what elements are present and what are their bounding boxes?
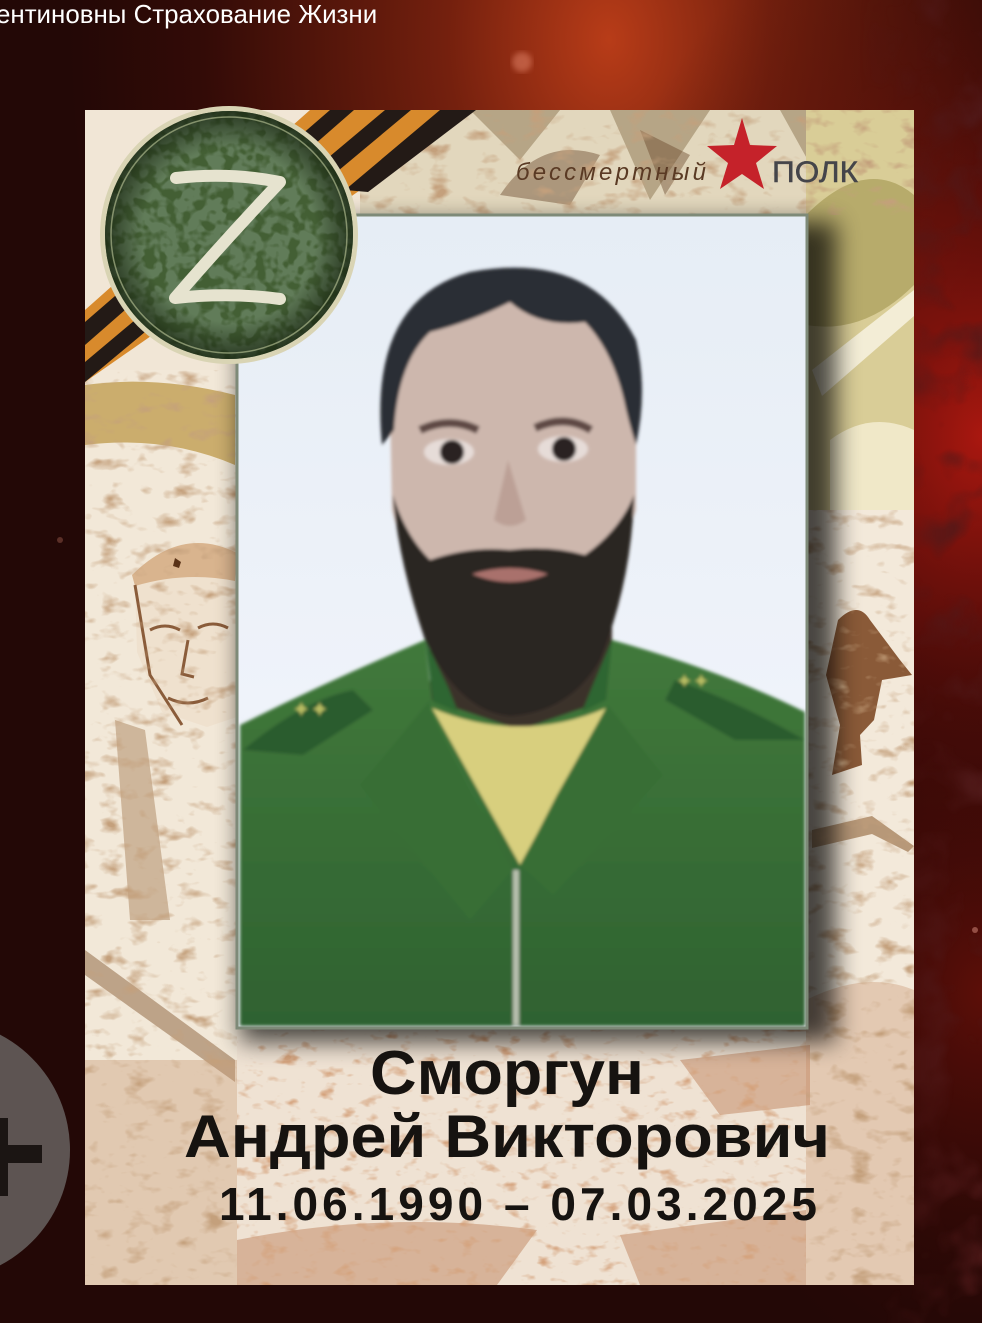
name and dates	[184, 1039, 830, 1230]
photo shadow	[240, 222, 836, 1042]
logo: Immortal Regiment: бессмертный	[516, 159, 706, 186]
memorial card	[85, 105, 914, 1285]
page caption text: ентиновны Страхование Жизни	[0, 1, 377, 29]
collage: top band	[360, 110, 914, 215]
St George ribbon	[85, 110, 476, 382]
portrait photo	[237, 215, 807, 1028]
life dates: 11.06.1990 – 07.03.2025	[219, 1178, 817, 1230]
collage: rust patches near name	[237, 1045, 810, 1285]
collage: right olive panel	[806, 110, 914, 510]
Z emblem	[100, 105, 360, 365]
collage: right lower soldier	[806, 510, 914, 1285]
round plus button	[0, 1020, 70, 1280]
surname: Сморгун	[370, 1039, 644, 1108]
neck and face	[380, 268, 642, 716]
uniform	[240, 600, 805, 1026]
collage: engraving texture	[85, 110, 914, 1285]
logo: Immortal Regiment: ПОЛК	[772, 156, 859, 189]
collage: bottom battlefield	[237, 1040, 806, 1285]
uniform: ✦✦	[676, 671, 710, 693]
collage: left column soldier	[85, 370, 237, 1285]
logo: Immortal Regiment	[516, 118, 859, 189]
given name: Андрей Викторович	[184, 1103, 830, 1170]
uniform: ✦✦	[292, 697, 329, 722]
